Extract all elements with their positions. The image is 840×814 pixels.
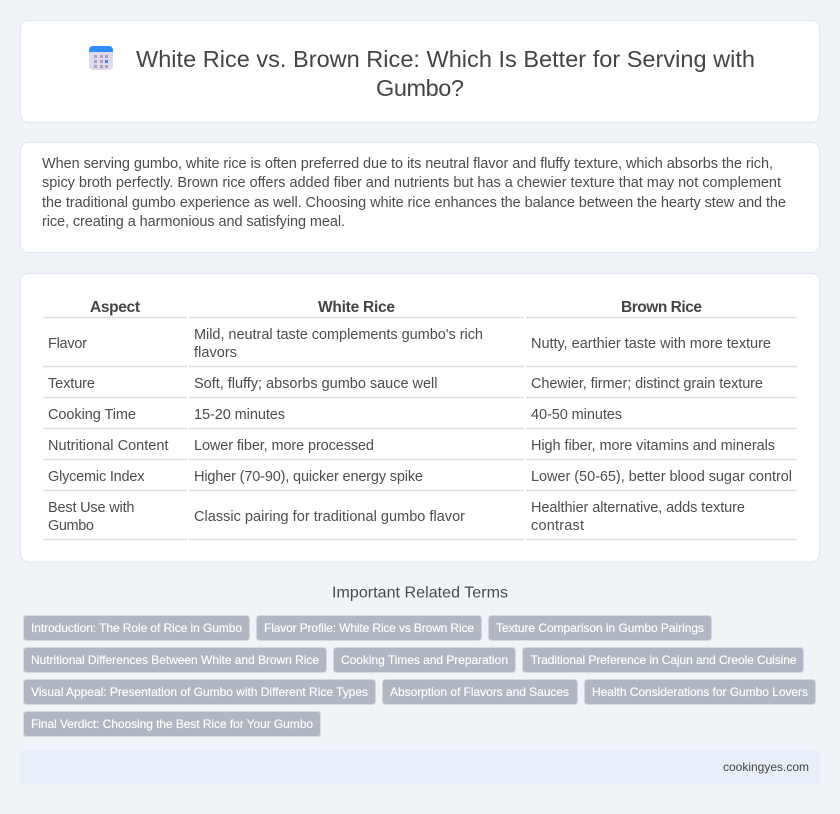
row: best use with gumbo xyxy=(43,500,797,540)
tag: Flavor Profile: White Rice vs Brown Rice xyxy=(264,621,474,635)
row: cooking time: 40-50 minutes xyxy=(531,407,622,423)
row: best use with gumbo: Classic pairing for traditional gumbo flavor xyxy=(194,509,465,525)
row: glycemic index: Glycemic Index xyxy=(48,469,145,485)
panel: introduction text xyxy=(20,142,820,252)
header panel xyxy=(20,20,820,122)
row: nutritional content: Nutritional Content xyxy=(48,438,168,454)
panel: introduction text: spicy broth perfectly. Brown rice offers added fiber and nutrients but has a chewier texture that may not complement xyxy=(42,175,781,191)
tag xyxy=(382,680,578,704)
row: cooking time: Cooking Time xyxy=(48,407,136,423)
table header row xyxy=(43,299,797,318)
tag xyxy=(24,712,320,736)
row: glycemic index xyxy=(43,469,797,490)
panel: comparison table xyxy=(20,274,820,562)
table header row: Brown Rice xyxy=(621,299,702,316)
tag xyxy=(488,616,712,640)
tag: Final Verdict: Choosing the Best Rice for Your Gumbo xyxy=(31,717,313,731)
row: glycemic index: Higher (70-90), quicker energy spike xyxy=(194,469,423,485)
tag: Visual Appeal: Presentation of Gumbo with Different Rice Types xyxy=(31,685,368,699)
tag: Introduction: The Role of Rice in Gumbo xyxy=(31,621,242,635)
row: best use with gumbo: Best Use with xyxy=(48,500,134,516)
tag xyxy=(334,648,516,672)
table header row: White Rice xyxy=(318,299,395,316)
panel: introduction text: rice, creating a harmonious and satisfying meal. xyxy=(42,214,345,230)
tag xyxy=(584,680,816,704)
row: flavor xyxy=(43,327,797,366)
row: texture: Chewier, firmer; distinct grain texture xyxy=(531,376,763,392)
row: texture: Soft, fluffy; absorbs gumbo sauce well xyxy=(194,376,438,392)
row: cooking time xyxy=(43,407,797,428)
tag xyxy=(24,680,376,704)
row: nutritional content: Lower fiber, more processed xyxy=(194,438,374,454)
tag: Cooking Times and Preparation xyxy=(341,653,508,667)
tag xyxy=(256,616,482,640)
tag: Health Considerations for Gumbo Lovers xyxy=(592,685,808,699)
tag: Absorption of Flavors and Sauces xyxy=(390,685,569,699)
row: flavor: Flavor xyxy=(48,336,87,352)
row: texture: Texture xyxy=(48,376,95,392)
row: flavor: Mild, neutral taste complements gumbo's rich xyxy=(194,327,483,343)
row: best use with gumbo: Healthier alternative, adds texture xyxy=(531,500,745,516)
panel: introduction text: When serving gumbo, white rice is often preferred due to its neutral flavor and fluffy texture, which absorbs the rich, xyxy=(42,156,773,172)
row: best use with gumbo: contrast xyxy=(531,518,584,534)
tag: Traditional Preference in Cajun and Creole Cuisine xyxy=(530,653,797,667)
title: White Rice vs. Brown Rice: Which Is Better for Serving with xyxy=(136,46,755,72)
table header row: Aspect xyxy=(90,299,140,316)
tag xyxy=(522,648,804,672)
row: cooking time: 15-20 minutes xyxy=(194,407,285,423)
tag: Nutritional Differences Between White and Brown Rice xyxy=(31,653,319,667)
row: texture xyxy=(43,376,797,398)
row: best use with gumbo: Gumbo xyxy=(48,518,94,534)
row: flavor: Nutty, earthier taste with more texture xyxy=(531,336,771,352)
heading: important related terms: Important Related Terms xyxy=(332,584,508,602)
row: flavor: flavors xyxy=(194,345,237,361)
row: nutritional content xyxy=(43,438,797,460)
title xyxy=(136,46,755,101)
tag xyxy=(24,648,326,672)
row: nutritional content: High fiber, more vitamins and minerals xyxy=(531,438,775,454)
icon: calendar xyxy=(89,46,113,70)
panel: introduction text: the traditional gumbo experience as well. Choosing white rice enhances the balance between the hearty stew and the xyxy=(42,195,786,211)
footer bar xyxy=(20,750,820,784)
row: glycemic index: Lower (50-65), better blood sugar control xyxy=(531,469,792,485)
related term tags xyxy=(24,616,816,736)
tag: Texture Comparison in Gumbo Pairings xyxy=(496,621,704,635)
tag xyxy=(24,616,250,640)
footer bar: cookingyes.com xyxy=(723,760,809,774)
title: Gumbo? xyxy=(376,75,464,101)
